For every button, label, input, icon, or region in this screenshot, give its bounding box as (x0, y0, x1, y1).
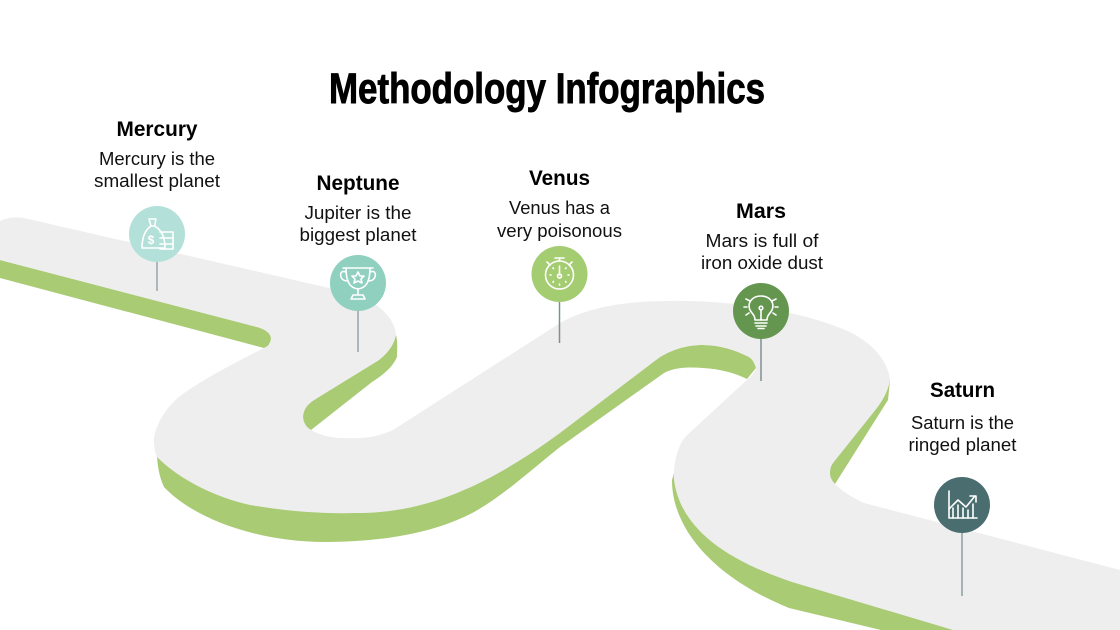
step: Saturn (908, 379, 1016, 596)
pin line (558, 300, 560, 343)
icon: growth chart (949, 491, 977, 518)
icon: stopwatch (546, 258, 574, 289)
description: Mercury is the (99, 149, 215, 169)
heading: Neptune (316, 172, 400, 195)
step: Neptune (300, 172, 416, 352)
pin line (961, 531, 963, 596)
pin circle (129, 206, 185, 262)
pin circle (330, 255, 386, 311)
title: Methodology Infographics (329, 65, 765, 113)
heading: Saturn (930, 379, 995, 402)
step: Venus (497, 167, 622, 343)
heading: Venus (529, 167, 590, 190)
road side: green edges (0, 260, 960, 630)
description: very poisonous (497, 221, 622, 241)
icon: light bulb (744, 296, 778, 328)
description: iron oxide dust (701, 253, 823, 273)
pin circle (934, 477, 990, 533)
description: biggest planet (300, 225, 416, 245)
heading: Mercury (116, 118, 198, 141)
step: Mars (701, 200, 823, 381)
description: smallest planet (94, 171, 220, 191)
description: Saturn is the (911, 413, 1014, 433)
icon: money bag and coins (142, 219, 173, 249)
pin line (357, 310, 359, 352)
icon: trophy (341, 268, 375, 299)
pin line (760, 337, 762, 381)
road surface (0, 217, 1120, 630)
winding road (0, 217, 1120, 630)
heading: Mars (736, 200, 786, 223)
step: Mercury (94, 118, 220, 291)
description: Venus has a (509, 198, 611, 218)
icon: money bag and coins: $ (148, 233, 155, 247)
pin circle (532, 246, 588, 302)
description: ringed planet (908, 435, 1016, 455)
description: Jupiter is the (304, 203, 412, 223)
description: Mars is full of (706, 231, 820, 251)
pin line (156, 260, 158, 291)
pin circle (733, 283, 789, 339)
